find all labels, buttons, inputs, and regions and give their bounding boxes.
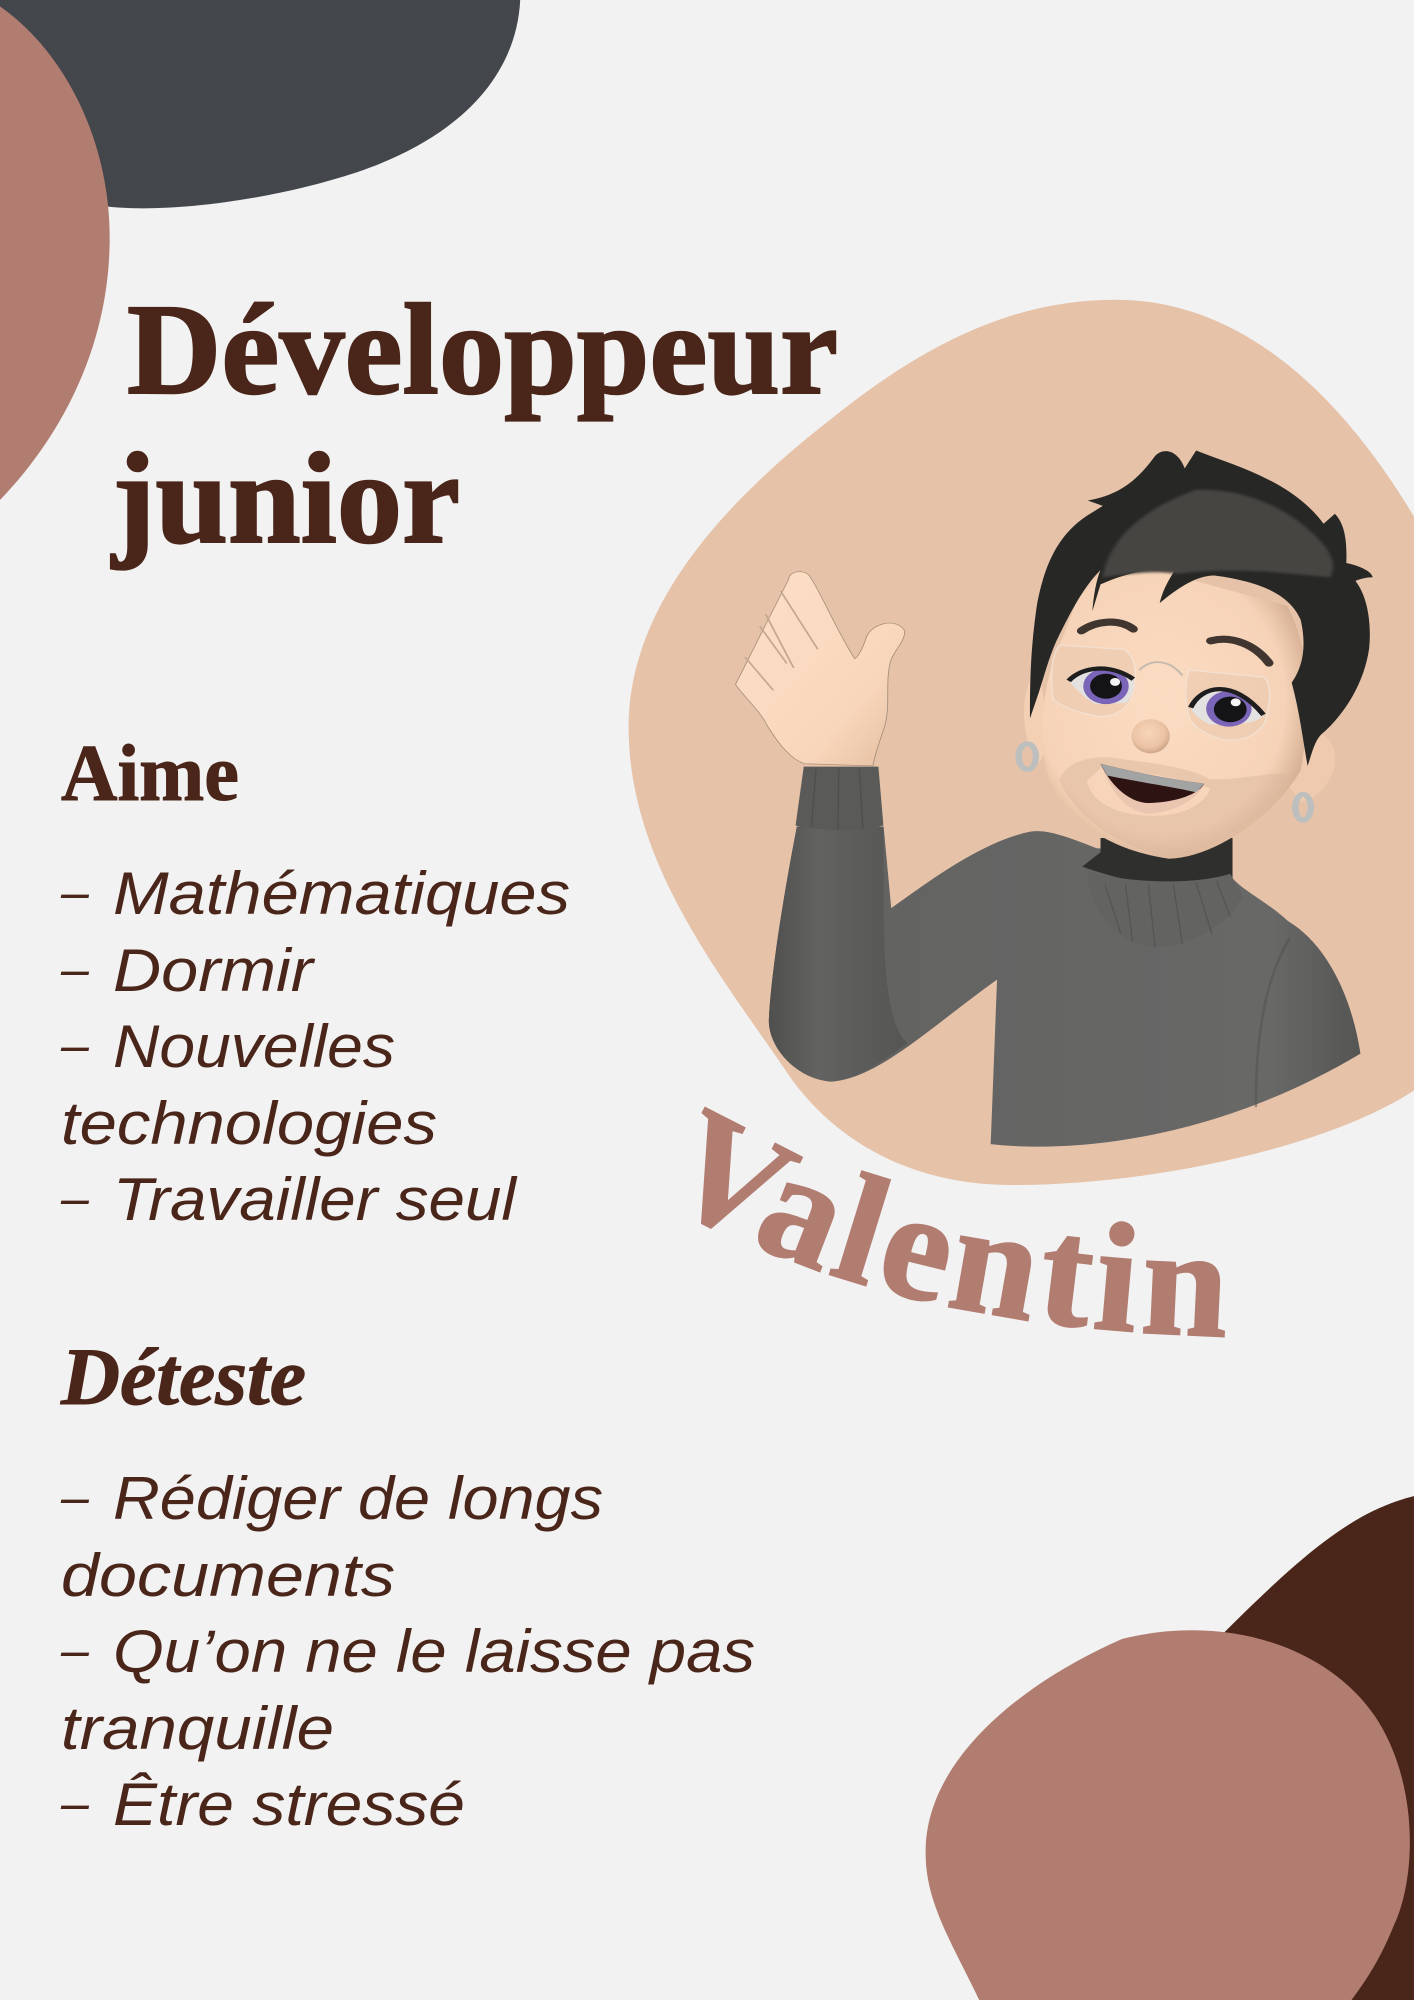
list: likes: – xyxy=(60,1017,103,1073)
list: dislikes: documents xyxy=(61,1542,395,1609)
eye: right xyxy=(1191,689,1263,727)
list: likes: Dormir xyxy=(113,937,315,1004)
avatar features xyxy=(735,451,1373,947)
face xyxy=(1042,570,1307,859)
list: dislikes: – xyxy=(60,1622,103,1678)
beard xyxy=(1060,757,1292,857)
eyebrows xyxy=(1081,622,1269,663)
list: likes: – xyxy=(60,1170,103,1226)
hand xyxy=(735,572,905,766)
earrings xyxy=(1019,744,1311,820)
avatar sweater xyxy=(769,827,1360,1147)
list: dislikes: – xyxy=(60,1469,103,1525)
hair xyxy=(1030,451,1373,766)
list: likes xyxy=(60,860,570,1233)
list: likes: Nouvelles xyxy=(113,1013,395,1080)
blob: peach portrait backdrop xyxy=(629,300,1414,1185)
list: dislikes xyxy=(60,1465,755,1838)
sweater neck shadow xyxy=(1082,838,1233,886)
list: likes: technologies xyxy=(61,1090,437,1157)
list: dislikes: Être stressé xyxy=(113,1771,465,1838)
turtleneck xyxy=(1087,871,1243,947)
glasses xyxy=(1051,645,1270,740)
heading: Aime: Aime xyxy=(61,730,239,818)
mouth xyxy=(1101,764,1204,814)
title: junior xyxy=(110,427,460,571)
blob: rose left xyxy=(0,6,110,500)
blob: dark top xyxy=(0,0,520,208)
list: likes: Mathématiques xyxy=(113,860,570,927)
blob: brown bottom right xyxy=(1218,1496,1414,2000)
list: dislikes: Rédiger de longs xyxy=(113,1465,603,1532)
list: dislikes: tranquille xyxy=(61,1695,334,1762)
list: likes: Travailler seul xyxy=(113,1166,518,1233)
eye: left xyxy=(1069,668,1134,704)
nose xyxy=(1131,719,1170,753)
heading: Déteste: Déteste xyxy=(60,1331,306,1422)
list: dislikes: – xyxy=(60,1775,103,1831)
name: Valentin: Valentin xyxy=(701,1106,1225,1338)
title: Développeur xyxy=(127,278,838,422)
list: likes: – xyxy=(60,941,103,997)
blob: rose bottom right xyxy=(926,1630,1410,2000)
list: likes: – xyxy=(60,864,103,920)
avatar: waving character xyxy=(735,451,1373,1147)
list: dislikes: Qu’on ne le laisse pas xyxy=(113,1618,755,1685)
ears xyxy=(1024,681,1335,802)
cuff xyxy=(796,767,883,830)
